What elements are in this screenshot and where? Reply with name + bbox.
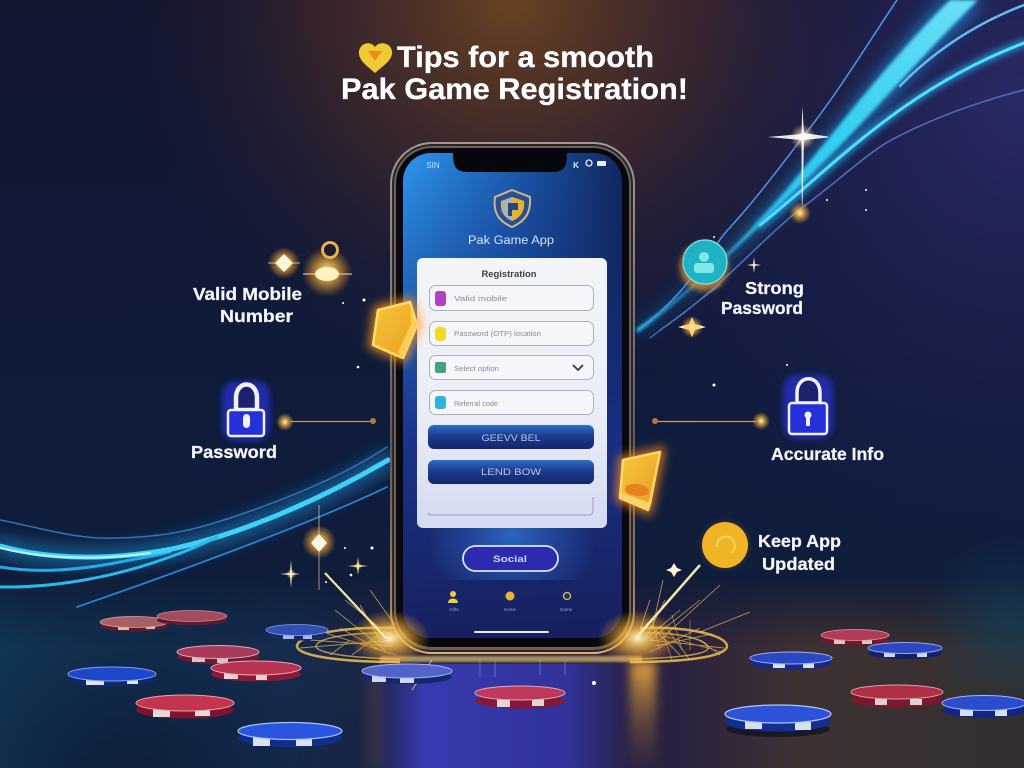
label: Number	[220, 306, 293, 326]
sparkles	[280, 106, 867, 685]
chip	[266, 624, 328, 640]
icon: teal badge	[680, 240, 728, 291]
field: select	[430, 356, 594, 380]
label: Valid Mobile	[193, 284, 302, 304]
social button: Social	[493, 554, 527, 565]
app logo: shield	[495, 190, 530, 227]
field: info: Referral code	[454, 401, 498, 408]
button one: GEEVV BEL	[482, 433, 540, 443]
chip	[362, 664, 452, 684]
field: mobile	[430, 286, 594, 310]
icon: padlock	[783, 375, 833, 439]
notch	[453, 150, 567, 172]
tab bar icons: Game	[560, 607, 573, 612]
home indicator	[474, 631, 549, 633]
chip	[177, 646, 259, 664]
tab bar icons: Gifts	[449, 607, 459, 612]
phone body	[390, 142, 635, 654]
chip	[821, 630, 889, 646]
tip: accurate info	[652, 375, 884, 464]
status bar: SIN	[426, 161, 440, 170]
light streaks: right	[636, 0, 1024, 338]
icon: gold coin	[697, 517, 753, 573]
label	[193, 284, 302, 326]
tab bar icons: Home	[504, 607, 516, 612]
phone	[390, 142, 635, 654]
label: Strong	[745, 278, 804, 298]
button two	[428, 460, 594, 484]
label	[721, 278, 804, 318]
casino chips	[68, 610, 1024, 747]
tip: password	[191, 381, 376, 462]
chip	[68, 667, 156, 686]
status bar: K	[573, 161, 579, 170]
field: password: Password (OTP) location	[454, 331, 541, 338]
status bar	[426, 160, 606, 170]
chip shadow and body	[725, 705, 831, 737]
label: Updated	[762, 554, 835, 574]
sparks at phone base	[325, 565, 750, 690]
chip	[851, 685, 943, 708]
light streaks: left	[0, 447, 388, 607]
title: Tips for a smooth	[397, 41, 654, 74]
screen	[403, 153, 622, 638]
empty field	[428, 497, 593, 515]
registration card	[417, 258, 607, 528]
label: Password	[191, 442, 277, 462]
chip	[238, 722, 342, 747]
chip	[211, 661, 301, 682]
chip	[100, 616, 168, 632]
chip	[750, 652, 832, 670]
button one	[428, 425, 594, 449]
title	[341, 41, 688, 106]
social button	[463, 546, 558, 571]
floating gold card: right	[620, 452, 660, 510]
icon: padlock	[222, 381, 270, 441]
field: mobile: Valid mobile	[454, 296, 507, 303]
chip	[136, 695, 234, 718]
title: Pak Game Registration!	[341, 73, 688, 106]
button two: LEND BOW	[481, 467, 542, 477]
tab bar icons	[448, 591, 573, 612]
field: password	[430, 322, 594, 346]
field: info	[430, 390, 594, 414]
icon: location pin sparkle	[268, 242, 352, 297]
chip	[868, 642, 942, 659]
spark ring behind phone	[297, 615, 727, 662]
chip	[157, 610, 227, 626]
field: select: Select option	[454, 366, 499, 373]
floating gold card: left	[373, 302, 417, 358]
connector	[652, 412, 770, 430]
tip: valid mobile number	[193, 242, 352, 326]
chip	[942, 696, 1024, 718]
tip: strong password	[680, 240, 804, 318]
app name: Pak Game App	[468, 235, 554, 247]
label: Password	[721, 298, 803, 318]
label	[758, 531, 841, 574]
icon: heart	[359, 43, 392, 73]
tip: keep app updated	[697, 517, 841, 574]
card title: Registration	[482, 269, 536, 279]
label: Accurate Info	[771, 444, 884, 464]
chip	[475, 686, 565, 708]
label: Keep App	[758, 531, 841, 551]
connector	[276, 413, 376, 431]
